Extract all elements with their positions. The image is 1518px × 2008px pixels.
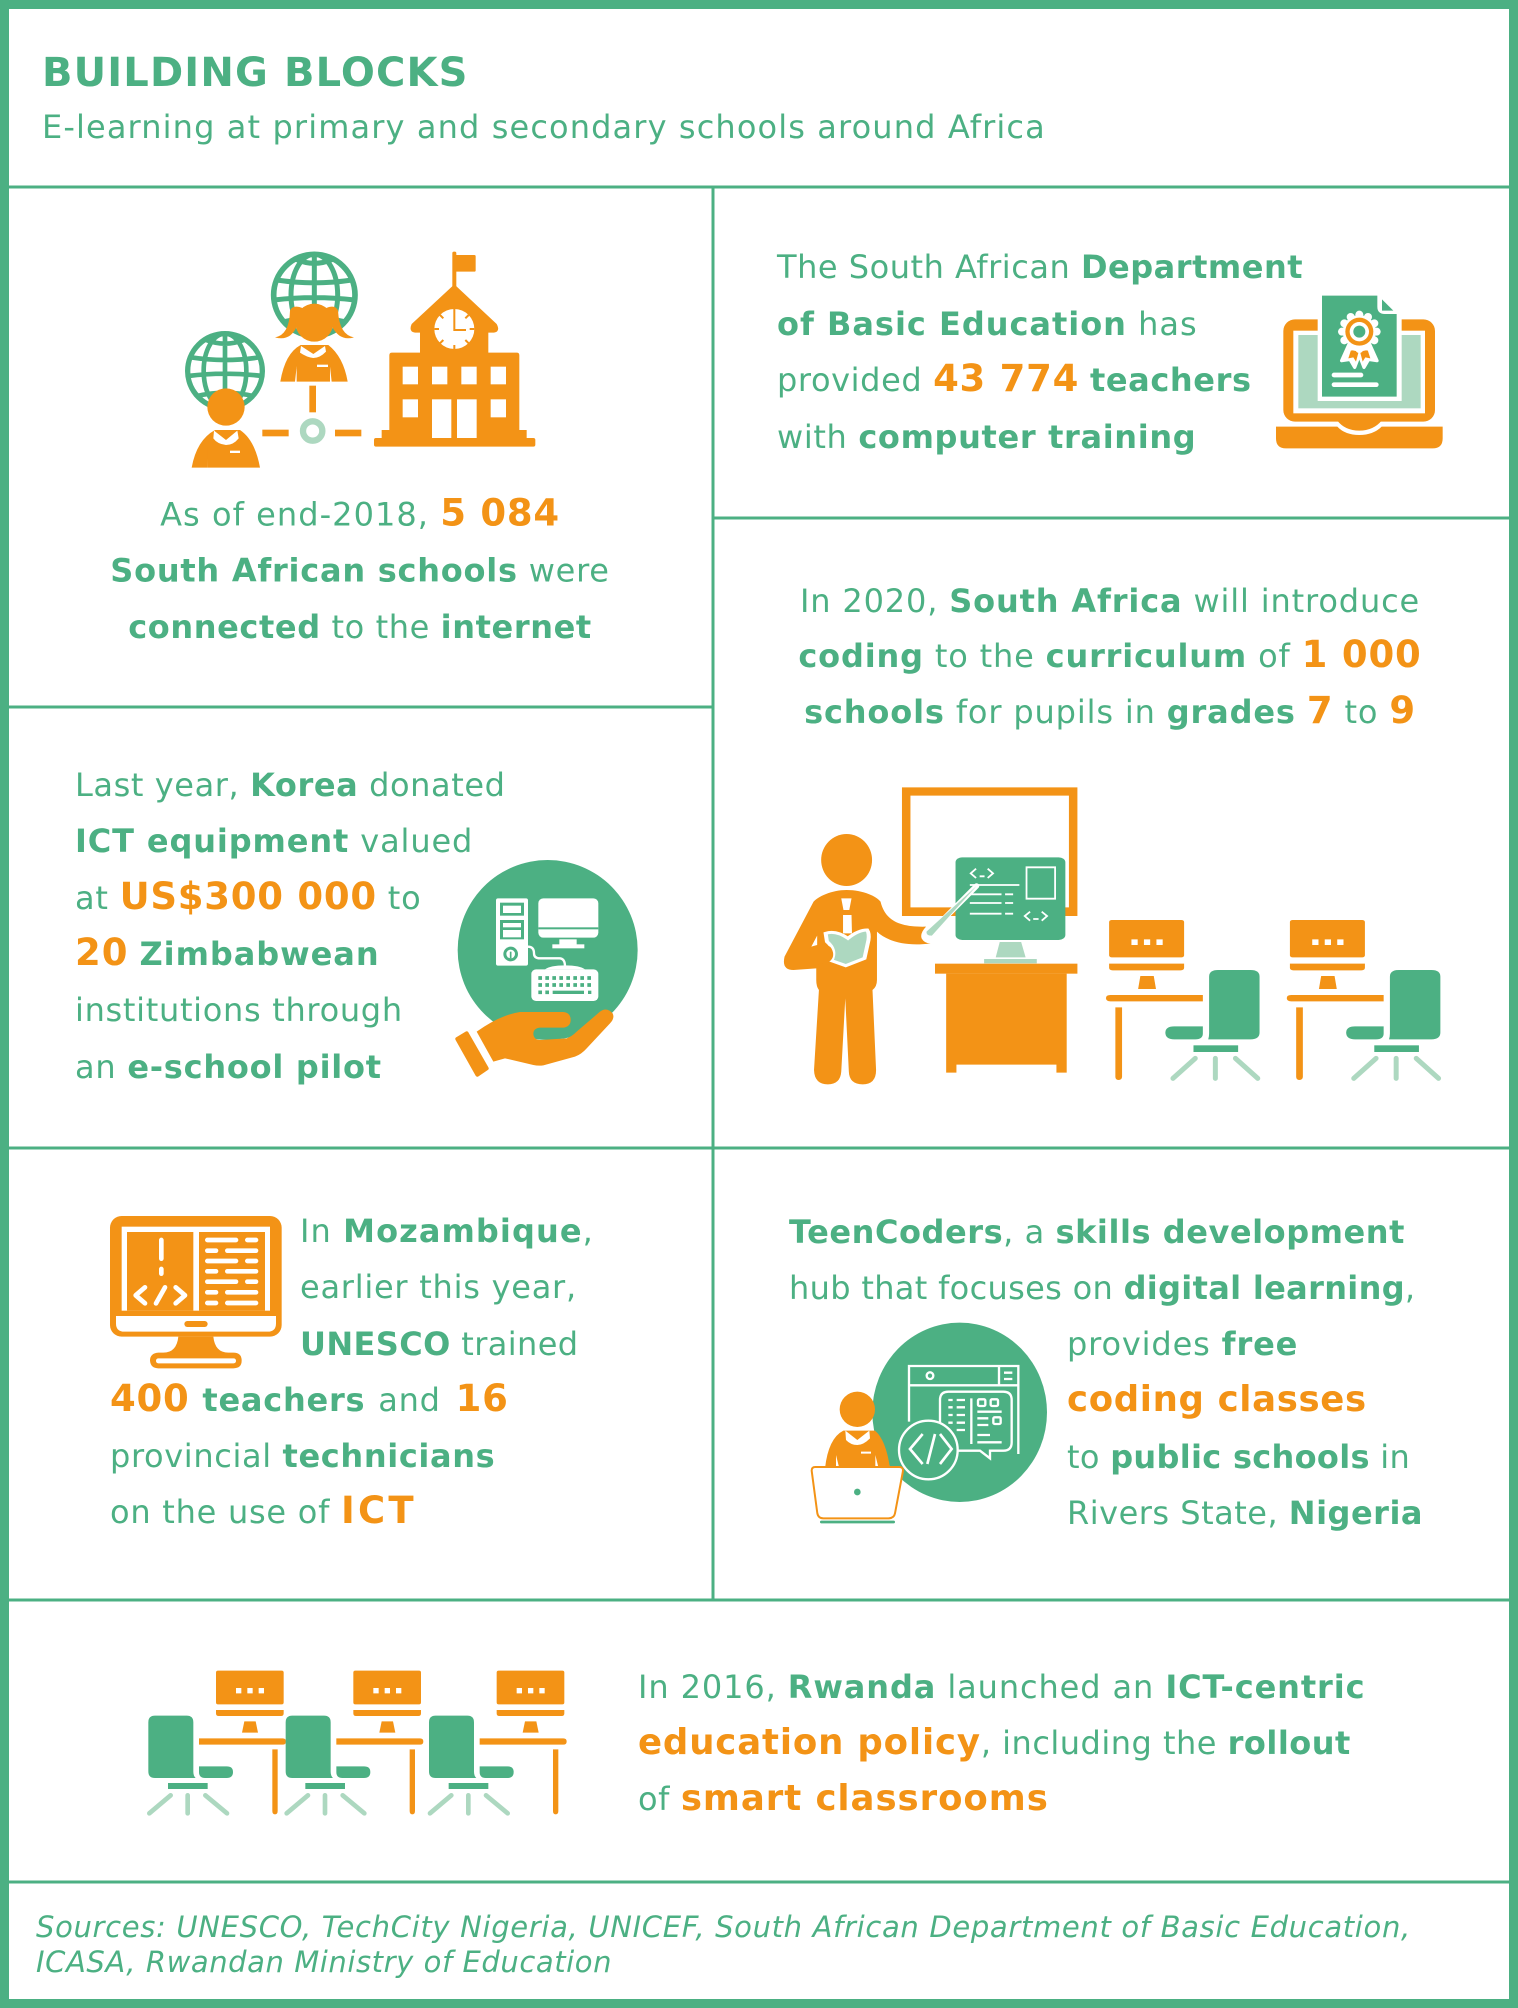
panel: Korea donation [75, 766, 638, 1086]
text: coding curriculum: In 2020, South Africa will introduce [800, 582, 1420, 620]
text: TeenCoders: TeenCoders, a skills development [789, 1213, 1405, 1251]
icon: row of three desks [148, 1671, 567, 1814]
text: Korea donation: an e-school pilot [75, 1048, 382, 1086]
text: schools connected: connected to the internet [128, 608, 592, 646]
text: Korea donation: Last year, Korea donated [75, 766, 506, 804]
panel: teacher training [776, 248, 1443, 456]
text: schools connected [110, 492, 610, 646]
subtitle: E-learning at primary and secondary schools around Africa [42, 108, 1046, 146]
sources: Sources: UNESCO, TechCity Nigeria, UNICEF, South African Department of Basic Education, [36, 1910, 1411, 1944]
icon: pupils connected to school [188, 252, 535, 468]
desk and chair 2 [1287, 920, 1440, 1080]
text: Korea donation: ICT equipment valued [75, 822, 473, 860]
text: coding curriculum: schools for pupils in grades 7 to 9 [804, 689, 1416, 732]
icon: monitor with code [110, 1216, 282, 1368]
desk set 3 [429, 1671, 567, 1814]
whiteboard [902, 787, 1077, 916]
pointer [926, 886, 977, 936]
text: Rwanda: of smart classrooms [638, 1778, 1049, 1819]
text: Mozambique: earlier this year, [300, 1268, 577, 1306]
text: TeenCoders: Rivers State, Nigeria [1067, 1494, 1423, 1532]
text: Korea donation [75, 766, 506, 1086]
text: teacher training: with computer training [777, 418, 1196, 456]
text: coding curriculum: coding to the curriculum of 1 000 [798, 633, 1422, 676]
class screen [956, 857, 1065, 963]
text: Korea donation: institutions through [75, 991, 403, 1029]
text: Mozambique: provincial technicians [110, 1437, 495, 1475]
text: teacher training [776, 248, 1303, 456]
text: Rwanda: In 2016, Rwanda launched an ICT-centric [638, 1668, 1365, 1706]
text: Mozambique: In Mozambique, [300, 1212, 594, 1250]
panel: Rwanda [148, 1668, 1365, 1819]
text: coding curriculum [798, 582, 1422, 732]
text: Rwanda [638, 1668, 1365, 1819]
text: Mozambique: 400 teachers and 16 [110, 1377, 509, 1420]
text: teacher training: provided 43 774 teachers [777, 357, 1252, 400]
text: Rwanda: education policy, including the rollout [638, 1722, 1351, 1763]
text: Mozambique: on the use of ICT [110, 1489, 417, 1532]
icon: laptop with certificate [1276, 290, 1443, 448]
panel: TeenCoders [789, 1213, 1423, 1532]
text: Korea donation: 20 Zimbabwean [75, 931, 380, 974]
panel: coding curriculum [784, 582, 1440, 1084]
icon: teacher in classroom [784, 787, 1440, 1084]
text: teacher training: The South African Department [776, 248, 1303, 286]
text: TeenCoders: provides free [1067, 1325, 1298, 1363]
school [452, 252, 456, 288]
desk set 2 [286, 1671, 423, 1814]
teacher desk [935, 964, 1077, 1073]
text: teacher training: of Basic Education has [777, 305, 1198, 343]
icon: hand holding computer [457, 860, 638, 1075]
text: TeenCoders [789, 1213, 1423, 1532]
text: TeenCoders: coding classes [1067, 1379, 1367, 1420]
text: schools connected: As of end-2018, 5 084 [160, 492, 560, 534]
text: Mozambique: UNESCO trained [300, 1325, 578, 1363]
sources [36, 1910, 1411, 1979]
text: Mozambique [110, 1212, 594, 1532]
icon: pupil with laptop and code [812, 1323, 1047, 1523]
certificate seal [1338, 311, 1381, 367]
panel: Mozambique [110, 1212, 594, 1532]
text: schools connected: South African schools were [110, 552, 610, 590]
text: Korea donation: at US$300 000 to [75, 875, 421, 918]
teacher [784, 834, 931, 1084]
text: TeenCoders: to public schools in [1067, 1438, 1410, 1476]
text: TeenCoders: hub that focuses on digital learning, [789, 1269, 1415, 1307]
title: BUILDING BLOCKS [42, 50, 469, 96]
sources: ICASA, Rwandan Ministry of Education [36, 1945, 612, 1979]
panel: schools connected [110, 252, 610, 646]
desk and chair 1 [1106, 920, 1260, 1080]
desk set 1 [148, 1671, 286, 1814]
